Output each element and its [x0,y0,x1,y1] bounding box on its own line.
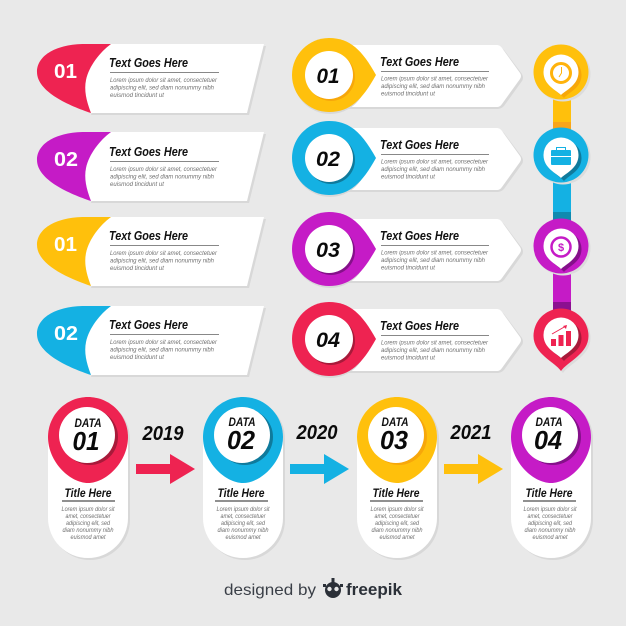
body text: euismod amet [532,534,569,541]
body text: adipiscing elit, sed [375,520,419,527]
title: Title Here [372,486,420,500]
body text: euismod tincidunt ut [110,354,165,361]
body text: euismod tincidunt ut [381,354,436,362]
body text: adipiscing elit, sed diam nonummy nibh [381,347,485,354]
arrow: yellow [444,454,503,484]
number 01: 01 [54,61,77,83]
body text: euismod tincidunt ut [381,264,436,272]
panel: data card 03 [357,397,439,560]
blue teardrop [203,397,283,483]
title: Title Here [218,486,265,500]
heading: Text Goes Here [380,319,459,333]
body text: Lorem ipsum dolor sit [216,506,271,513]
panel: data card 02 [203,397,285,560]
blue pin [292,121,376,195]
panel: data card 04 [511,397,593,560]
body text: Lorem ipsum dolor sit amet, consectetuer [110,77,218,84]
yellow teardrop [357,397,437,483]
body text: Lorem ipsum dolor sit amet, consectetuer [381,250,489,256]
red tab [37,44,111,113]
heading: Text Goes Here [109,318,188,332]
body text: Lorem ipsum dolor sit amet, consectetuer [110,339,218,346]
number 02: 02 [316,148,340,171]
body text: euismod tincidunt ut [381,174,436,180]
label DATA: DATA [536,417,562,429]
panel: left banner 03 [37,217,266,288]
heading: Text Goes Here [380,229,459,243]
body text: adipiscing elit, sed [528,520,572,527]
blue stem [553,175,571,221]
body text: adipiscing elit, sed diam nonummy nibh [110,346,214,354]
number 03: 03 [316,239,340,262]
body text: adipiscing elit, sed [221,520,265,527]
icon: clock pin [534,44,588,100]
panel: data card 01 [48,397,130,560]
purple pin [292,212,376,286]
red pin [292,302,376,376]
body text: Lorem ipsum dolor sit [370,506,425,513]
purple stem [553,265,571,311]
number 02: 02 [54,149,78,171]
yellow stem [553,90,571,130]
panel: arrow card 02 [292,121,523,197]
panel: left banner 02 [37,132,266,203]
body text: Lorem ipsum dolor sit amet, consectetuer [110,250,218,257]
purple tab [37,132,111,201]
number 01: 01 [72,426,100,456]
panel: arrow card 01 [292,38,523,114]
body text: amet, consectetuer [220,513,266,520]
number 01: 01 [54,234,77,256]
number 02: 02 [227,425,256,455]
panel: arrow card 03 [292,212,523,288]
year label 2019: 2019 [142,423,184,445]
body text: diam nonummy nibh [62,527,114,534]
number 04: 04 [316,329,340,352]
body text: amet, consectetuer [374,513,420,520]
body text: euismod tincidunt ut [381,90,436,98]
body text: Lorem ipsum dolor sit amet, consectetuer [381,158,489,166]
panel: arrow card 04 [292,302,523,378]
body text: adipiscing elit, sed diam nonummy nibh [110,84,214,92]
body text: euismod tincidunt ut [110,265,165,272]
red teardrop [48,397,128,483]
yellow pin [292,38,376,112]
body text: euismod tincidunt ut [110,92,165,99]
body text: euismod amet [380,534,416,541]
heading: Text Goes Here [380,55,459,69]
number 02: 02 [54,323,78,345]
footer credit [224,578,403,599]
label DATA: DATA [382,417,408,429]
yellow tab [37,217,111,286]
body text: diam nonummy nibh [218,527,269,534]
body text: Lorem ipsum dolor sit amet, consectetuer [381,340,489,346]
label DATA: DATA [74,418,102,430]
body text: Lorem ipsum dolor sit [524,506,578,513]
body text: diam nonummy nibh [524,527,576,534]
body text: adipiscing elit, sed diam nonummy nibh [110,174,214,180]
heading: Text Goes Here [109,229,188,243]
purple teardrop [511,397,591,483]
blue tab [37,306,111,375]
heading: Text Goes Here [109,145,188,159]
year label 2020: 2020 [296,422,338,444]
body text: diam nonummy nibh [372,527,423,534]
body text: Lorem ipsum dolor sit amet, consectetuer [110,166,218,173]
body text: Lorem ipsum dolor sit [62,506,116,513]
arrow: blue [290,454,349,484]
body text: euismod tincidunt ut [110,181,165,188]
body text: Lorem ipsum dolor sit amet, consectetuer [381,76,489,82]
body text: euismod amet [70,534,107,541]
body text: adipiscing elit, sed diam nonummy nibh [110,258,214,264]
body text: amet, consectetuer [66,513,111,520]
brand name: freepik [346,580,403,599]
title: Title Here [64,486,112,500]
body text: adipiscing elit, sed diam nonummy nibh [381,257,485,264]
year label 2021: 2021 [450,422,492,444]
body text: adipiscing elit, sed diam nonummy nibh [381,83,485,90]
icon: briefcase pin [534,128,588,182]
icon: growth chart pin [534,308,588,371]
panel: left banner 04 [37,306,266,377]
number 01: 01 [316,65,340,88]
number 04: 04 [534,425,563,455]
icon: dollar coin pin [534,218,588,274]
panel: vertical icon timeline [534,44,590,373]
icon: dollar coin pin: $ [558,242,564,254]
arrow: red [136,454,195,484]
body text: amet, consectetuer [528,513,573,520]
label DATA: DATA [228,417,256,429]
heading: Text Goes Here [109,56,188,70]
panel: left banner 01 [37,44,266,115]
body text: adipiscing elit, sed [66,520,110,527]
icon: freepik logo [323,578,343,598]
credit text: designed by [224,582,316,599]
title: Title Here [526,486,573,500]
body text: euismod amet [226,534,262,541]
number 03: 03 [380,425,409,455]
heading: Text Goes Here [380,138,459,152]
body text: adipiscing elit, sed diam nonummy nibh [381,166,485,173]
